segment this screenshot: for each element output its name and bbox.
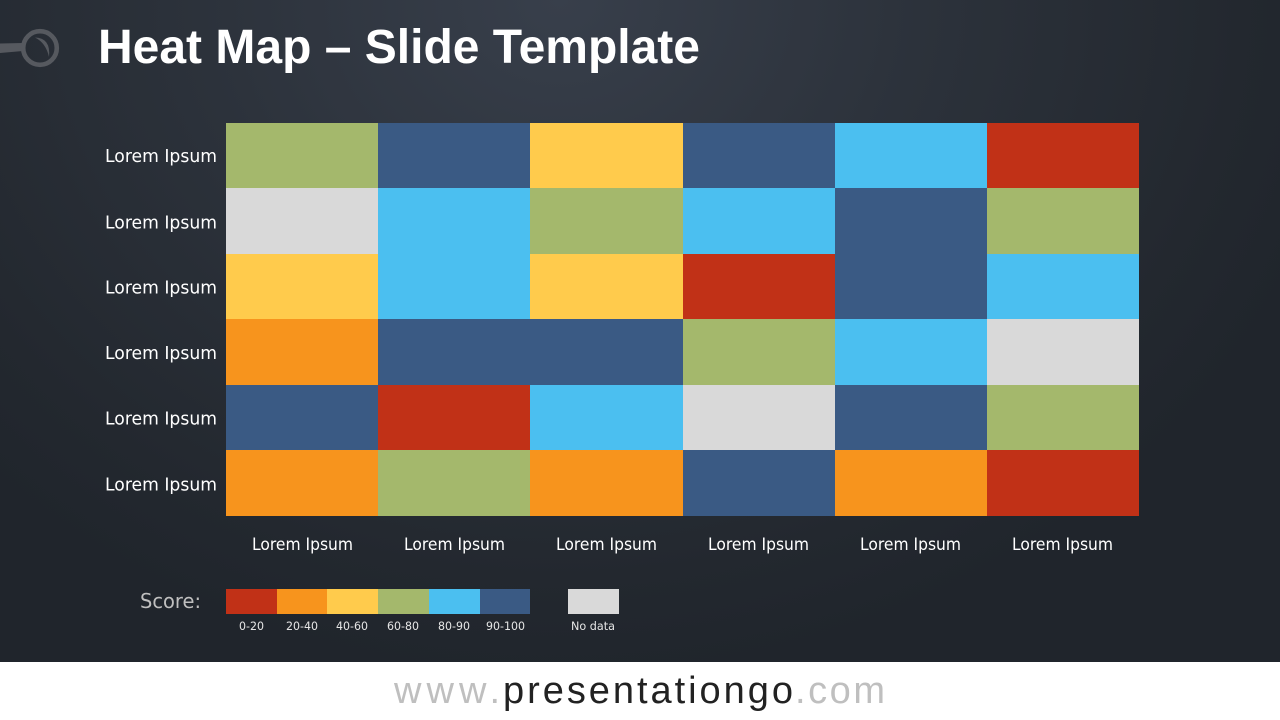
- legend labels: 80-90: [438, 619, 470, 633]
- row 6 cells: [226, 450, 1139, 516]
- row 1 cells: [226, 123, 1139, 188]
- row 2 cells: [226, 188, 1139, 254]
- legend labels: No data: [571, 619, 615, 633]
- row labels: Lorem Ipsum: [105, 343, 217, 364]
- footer website text: .com: [795, 670, 885, 712]
- row labels: Lorem Ipsum: [105, 474, 217, 496]
- column labels: Lorem Ipsum: [404, 535, 505, 554]
- column labels: Lorem Ipsum: [708, 535, 809, 554]
- legend labels: 40-60: [336, 619, 368, 633]
- legend labels: 90-100: [486, 619, 525, 633]
- row labels: [105, 146, 217, 496]
- row 4 cells: [226, 319, 1139, 385]
- column labels: Lorem Ipsum: [252, 535, 353, 554]
- footer website text: [393, 670, 885, 712]
- column labels: Lorem Ipsum: [556, 535, 657, 554]
- row labels: Lorem Ipsum: [105, 408, 217, 430]
- footer band: [0, 662, 1280, 720]
- legend labels: 0-20: [239, 619, 264, 633]
- row labels: Lorem Ipsum: [105, 278, 217, 298]
- row 3 cells: [226, 254, 1139, 319]
- legend labels: [239, 619, 615, 633]
- column labels: Lorem Ipsum: [1012, 535, 1113, 554]
- row 5 cells: [226, 385, 1139, 450]
- legend labels: 20-40: [286, 619, 318, 633]
- icon: magnifier logo: [0, 31, 57, 65]
- legend title: Score:: [140, 589, 201, 613]
- column labels: Lorem Ipsum: [860, 535, 961, 554]
- title: Heat Map – Slide Template: [98, 21, 700, 74]
- legend swatches: [226, 589, 619, 614]
- heat map grid: [226, 123, 1139, 516]
- footer website text: presentationgo: [503, 670, 793, 712]
- footer website text: www.: [393, 670, 500, 712]
- column labels: [252, 535, 1113, 554]
- legend: [140, 589, 619, 633]
- row labels: Lorem Ipsum: [105, 212, 217, 234]
- row labels: Lorem Ipsum: [105, 146, 217, 167]
- legend labels: 60-80: [387, 619, 419, 633]
